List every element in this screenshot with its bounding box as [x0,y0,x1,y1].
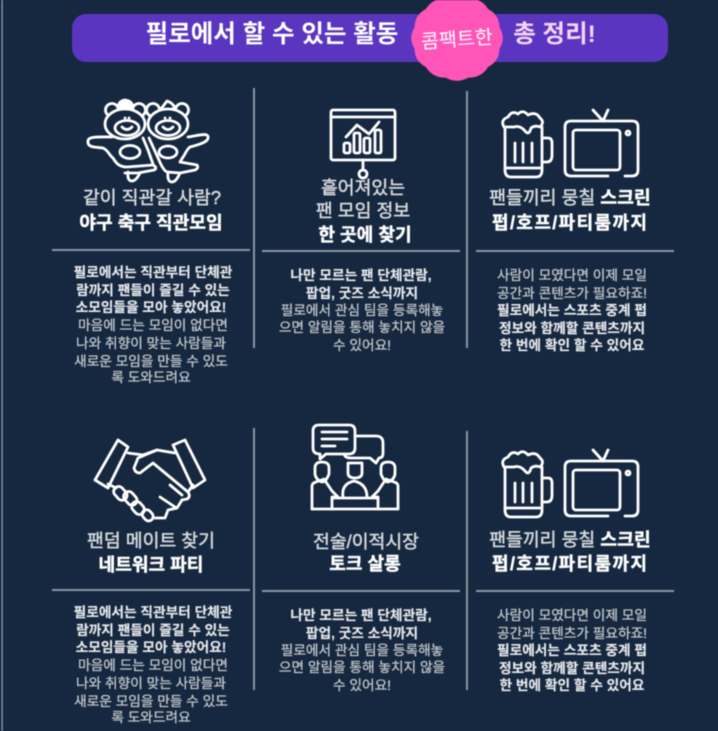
card description: 수 있어요! [333,678,391,693]
card description: 공간과 콘텐츠가 필요하죠! [497,286,647,301]
card title: 팬덤 메이트 찾기 [87,530,215,551]
card subtitle: 펍/호프/파티룸까지 [492,213,647,233]
card description: 사람이 모였다면 이제 모일 [497,608,647,623]
card description: 마음에 드는 모임이 없다면 [78,318,228,333]
card title: 흩어져있는 [321,177,405,198]
icon: beer mug and tv [503,450,638,517]
card description: 필로에서는 직관부터 단체관 [74,265,233,280]
pink badge [411,0,503,81]
panel: screen pub [489,110,651,353]
icon: group talk [312,425,398,509]
card description: 소모임들을 모아 놓았어요! [76,299,226,315]
card description [74,265,233,385]
card title: 전술/이적시장 [313,531,419,552]
card description [74,605,233,725]
card description: 필로에서는 직관부터 단체관 [74,605,233,620]
card description [497,268,647,353]
banner title end: 총 정리! [513,20,596,48]
card description: 록 도와드려요 [111,710,191,725]
banner title: 필로에서 할 수 있는 활동 [146,20,398,48]
panel: watch party [74,100,233,385]
card description: 새로운 모임을 만들 수 있도 [74,694,228,709]
card description: 팝업, 굿즈 소식까지 [306,286,418,301]
icon: two bears [88,100,208,182]
card title: 팬들끼리 뭉칠 스크린 [489,529,651,550]
card description: 새로운 모임을 만들 수 있도 [74,354,228,369]
card subtitle: 네트워크 파티 [99,555,203,575]
card subtitle: 야구 축구 직관모임 [79,213,223,233]
card title: 팬들끼리 뭉칠 스크린 [489,187,651,208]
icon: handshake [95,440,205,523]
card subtitle: 토크 살롱 [329,554,401,574]
header banner [72,0,668,81]
card description: 필로에서 관심 팀을 등록해놓 [281,643,443,658]
card description [279,268,445,353]
card description: 나와 취향이 맞는 사람들과 [76,336,226,351]
card description: 람까지 팬들이 즐길 수 있는 [76,623,230,638]
card description: 마음에 드는 모임이 없다면 [78,658,228,673]
card description: 한 번에 확인 할 수 있어요 [500,337,645,353]
banner pill [72,14,668,62]
card description: 사람이 모였다면 이제 모일 [497,268,647,283]
card description: 공간과 콘텐츠가 필요하죠! [497,626,647,641]
card description: 수 있어요! [333,338,391,353]
card description: 나만 모르는 팬 단체관람, [290,268,432,283]
card description: 람까지 팬들이 즐길 수 있는 [76,283,230,298]
card description: 나만 모르는 팬 단체관람, [290,608,432,623]
card description: 나와 취향이 맞는 사람들과 [76,676,226,691]
panel: fan meeting info [279,110,445,353]
panel: fan meeting info: 팬 모임 정보 [316,200,410,221]
card title: 같이 직관갈 사람? [83,187,221,208]
card description: 필로에서는 스포츠 중계 펍 [497,643,647,658]
card description: 록 도와드려요 [111,370,191,385]
card description: 필로에서 관심 팀을 등록해놓 [281,303,443,318]
card description: 필로에서는 스포츠 중계 펍 [497,303,647,318]
card subtitle: 펍/호프/파티룸까지 [492,554,647,574]
card description [279,608,445,693]
card description: 으면 알림을 통해 놓치지 않을 [279,660,445,675]
card description: 팝업, 굿즈 소식까지 [306,626,418,641]
card description: 소모임들을 모아 놓았어요! [76,639,226,655]
card subtitle: 한 곳에 찾기 [318,225,412,245]
card description [497,608,647,693]
card description: 한 번에 확인 할 수 있어요 [500,677,645,693]
panel: screen pub repeat [489,450,651,693]
icon: beer mug and tv [503,110,638,177]
badge text: 콤팩트한 [420,27,494,53]
card description: 정보와 함께할 콘텐츠까지 [499,321,645,336]
icon: presentation chart [331,110,395,178]
card description: 으면 알림을 통해 놓치지 않을 [279,320,445,335]
panel: networking party [74,440,233,725]
card description: 정보와 함께할 콘텐츠까지 [499,661,645,676]
panel: transfer market talk [279,425,445,693]
